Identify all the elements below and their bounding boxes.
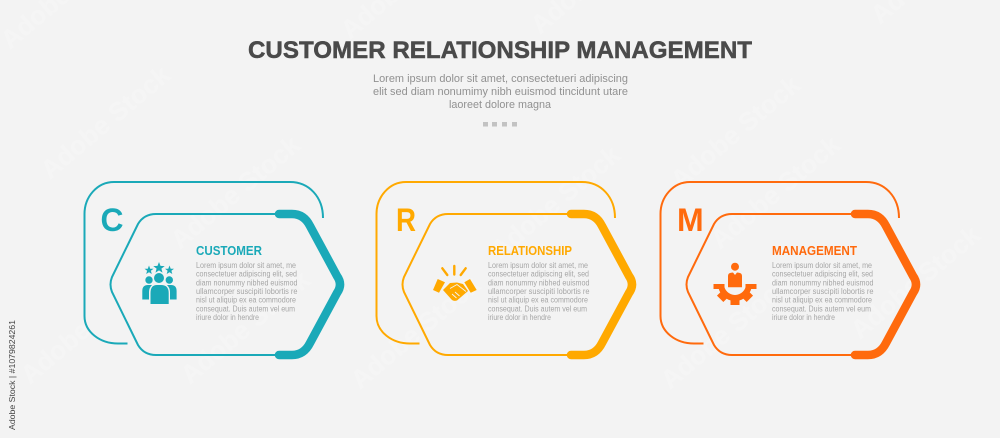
stock photo watermarks: Adobe Stock xyxy=(35,59,176,185)
letter C: C xyxy=(100,202,124,238)
body text: consequat. Duis autem vel eum xyxy=(196,304,295,313)
body text: nisl ut aliquip ex ea commodore xyxy=(772,296,872,305)
body text: diam nonummy nibhed euismod xyxy=(772,278,874,287)
stock photo watermarks: Adobe Stock xyxy=(665,69,806,195)
body text: diam nonummy nibhed euismod xyxy=(196,278,298,287)
stock photo watermarks: Adobe Stock xyxy=(845,219,986,345)
stock photo watermarks: Adobe Stock xyxy=(175,264,316,390)
body text xyxy=(196,261,298,322)
heading: customer: CUSTOMER xyxy=(196,244,262,258)
body text: diam nonummy nibhed euismod xyxy=(488,278,590,287)
heading: relationship: RELATIONSHIP xyxy=(488,244,572,258)
body text xyxy=(772,261,874,322)
panel: relationship xyxy=(376,182,632,355)
body text: Lorem ipsum dolor sit amet, me xyxy=(196,261,296,270)
inner hexagon outline xyxy=(110,214,282,355)
body text: consequat. Duis autem vel eum xyxy=(772,304,871,313)
body text: consectetuer adipiscing elit, sed xyxy=(772,270,873,279)
body text: ullamcorper suscipiti lobortis re xyxy=(196,287,298,296)
heading: management: MANAGEMENT xyxy=(772,244,857,258)
panel: customer xyxy=(84,182,340,355)
body text: ullamcorper suscipiti lobortis re xyxy=(488,287,590,296)
side credit text: Adobe Stock | #1079824261 xyxy=(7,320,17,430)
subtitle: Lorem ipsum dolor sit amet, consectetueri adipiscing xyxy=(373,73,628,85)
thick right edge xyxy=(571,214,632,355)
body text: iriure dolor in hendre xyxy=(772,313,835,322)
subtitle: laoreet dolore magna xyxy=(449,99,551,111)
outer rounded frame xyxy=(376,182,615,344)
icon: handshake xyxy=(433,266,477,301)
body text xyxy=(488,261,590,322)
subtitle: elit sed diam nonumimy nibh euismod tincidunt utare xyxy=(373,86,628,98)
icon: manager on gear xyxy=(714,263,756,305)
pagination dots xyxy=(483,122,517,126)
outer rounded frame xyxy=(660,182,899,344)
panel: management xyxy=(660,182,916,355)
body text: iriure dolor in hendre xyxy=(196,313,259,322)
thick right edge xyxy=(279,214,340,355)
body text: consequat. Duis autem vel eum xyxy=(488,304,587,313)
body text: nisl ut aliquip ex ea commodore xyxy=(488,296,588,305)
stock photo watermarks: Adobe Stock xyxy=(485,139,626,265)
stock photo watermarks: Adobe Stock xyxy=(165,129,306,255)
letter R: R xyxy=(396,202,416,238)
title: CUSTOMER RELATIONSHIP MANAGEMENT xyxy=(248,37,752,64)
stock photo watermarks: Adobe xyxy=(15,315,96,390)
outer rounded frame xyxy=(84,182,323,344)
thick right edge xyxy=(855,214,916,355)
body text: ullamcorper suscipiti lobortis re xyxy=(772,287,874,296)
stock photo watermarks: Adobe Stock xyxy=(655,269,796,395)
body text: Lorem ipsum dolor sit amet, me xyxy=(772,261,872,270)
stock photo watermarks: Adobe Stock xyxy=(345,269,486,395)
inner hexagon outline xyxy=(686,214,858,355)
body text: iriure dolor in hendre xyxy=(488,313,551,322)
stock photo watermarks: Adobe Stock xyxy=(705,129,846,255)
body text: Lorem ipsum dolor sit amet, me xyxy=(488,261,588,270)
letter M: M xyxy=(677,202,704,238)
body text: nisl ut aliquip ex ea commodore xyxy=(196,296,296,305)
body text: consectetuer adipiscing elit, sed xyxy=(196,270,297,279)
body text: consectetuer adipiscing elit, sed xyxy=(488,270,589,279)
subtitle xyxy=(373,73,628,111)
inner hexagon outline xyxy=(402,214,574,355)
icon: customers with stars xyxy=(142,262,177,304)
